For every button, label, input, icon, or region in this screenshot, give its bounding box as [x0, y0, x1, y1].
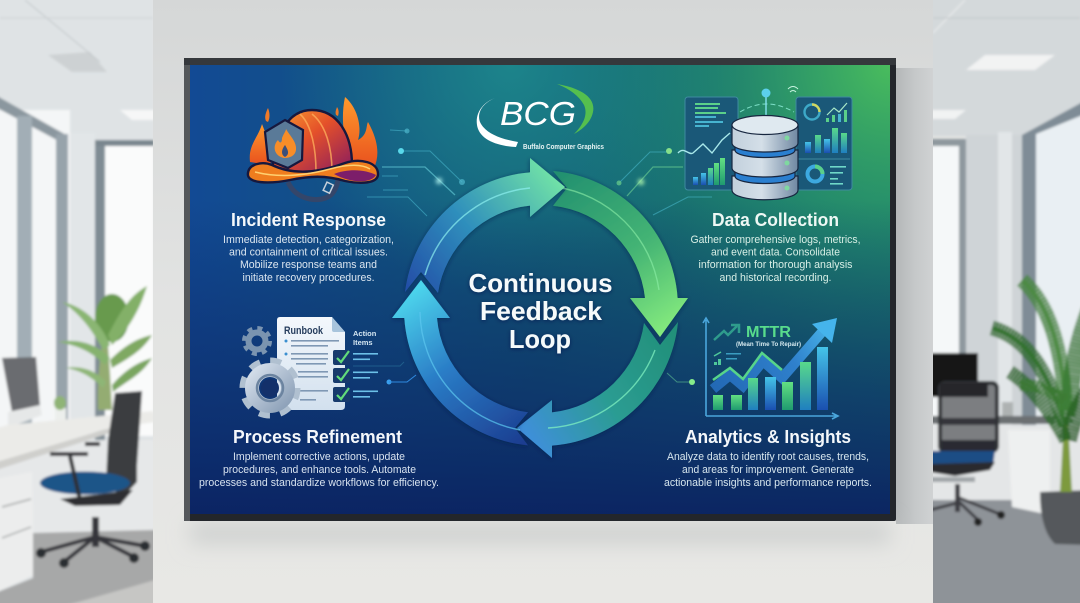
circuit lines: [353, 130, 712, 382]
axes: [703, 318, 838, 419]
icon: MTTR growth chart: [703, 318, 838, 419]
heading: Process Refinement: [233, 427, 402, 447]
connector: [389, 375, 416, 382]
feedback loop ring: [392, 158, 688, 458]
small gear: [244, 328, 270, 354]
description: [199, 451, 439, 489]
circuit nodes: [386, 128, 695, 385]
description: initiate recovery procedures.: [242, 272, 374, 284]
mini stat icon: [714, 352, 741, 365]
central wall: [153, 0, 933, 603]
heading: Data Collection: [712, 210, 839, 230]
desk chair: [106, 391, 142, 498]
document lines: [284, 340, 339, 401]
big gear: [243, 361, 297, 415]
description: [223, 234, 394, 284]
centre title: Feedback: [480, 296, 603, 326]
description: procedures, and enhance tools. Automate: [223, 464, 416, 476]
arrow: blue bottom left: [392, 280, 528, 445]
description: and event data. Consolidate: [711, 246, 840, 258]
arrow: teal bottom right: [517, 322, 678, 458]
plant: [98, 345, 112, 410]
arrow: green top right: [553, 171, 688, 337]
right room: [930, 0, 1080, 603]
action items label: [353, 329, 377, 347]
BCG wordmark: BCG: [500, 95, 576, 132]
folded corner: [332, 317, 345, 332]
runbook title: Runbook: [284, 325, 324, 337]
left dashboard: [678, 97, 738, 190]
description: and historical recording.: [720, 272, 832, 284]
action items label: Items: [353, 338, 373, 347]
tagline: Buffalo Computer Graphics: [523, 144, 604, 151]
check boxes: [333, 350, 350, 402]
action items label: Action: [353, 329, 377, 338]
green swoosh: [557, 84, 593, 134]
logo: BCG: [477, 84, 604, 151]
small arrow icon: [714, 325, 739, 340]
description: [664, 451, 872, 489]
MTTR subtitle: (Mean Time To Repair): [736, 341, 801, 348]
description: [690, 234, 860, 284]
description: Immediate detection, categorization,: [223, 234, 394, 246]
centre title: Loop: [509, 324, 571, 354]
database lights: [784, 136, 790, 190]
MTTR label: MTTR: [746, 324, 791, 341]
heading: Analytics & Insights: [685, 427, 851, 447]
arrow: blue to green top left: [405, 158, 565, 293]
palm plant and pot: [1040, 490, 1080, 545]
database cylinder: [732, 116, 798, 200]
screen background: [190, 65, 890, 514]
panel: incident response: [223, 97, 394, 284]
panel: analytics and insights: [664, 318, 872, 489]
left room: [0, 0, 155, 603]
description: actionable insights and performance reports.: [664, 477, 872, 489]
white swoosh: [477, 98, 518, 147]
description: and areas for improvement. Generate: [682, 464, 854, 476]
description: Gather comprehensive logs, metrics,: [690, 234, 860, 246]
bars: [713, 347, 828, 410]
description: Analyze data to identify root causes, trends,: [667, 451, 869, 463]
description: Implement corrective actions, update: [233, 451, 405, 463]
description: processes and standardize workflows for efficiency.: [199, 477, 439, 489]
panel: data collection: [678, 86, 860, 284]
chair: [940, 383, 997, 451]
top node and wifi: [740, 86, 798, 115]
centre title: Continuous: [468, 268, 612, 298]
monitor and desk: [2, 357, 40, 412]
icon: database with dashboards: [678, 86, 852, 200]
description: Mobilize response teams and: [240, 259, 377, 271]
heading: Incident Response: [231, 210, 386, 230]
panel: process refinement: [199, 317, 439, 489]
description: and containment of critical issues.: [229, 246, 388, 258]
display frame: [184, 58, 896, 521]
description: information for thorough analysis: [698, 259, 853, 271]
document: [277, 317, 345, 410]
wall shadows: [896, 68, 933, 524]
centre title: [468, 268, 612, 354]
floor and cabinet: [930, 425, 1080, 510]
icon: firefighter helmet with flames: [248, 97, 378, 200]
trend band and arrow: [713, 318, 837, 389]
icon: runbook with gears: [243, 317, 416, 415]
right dashboard: [796, 97, 852, 190]
action lines: [353, 353, 378, 398]
